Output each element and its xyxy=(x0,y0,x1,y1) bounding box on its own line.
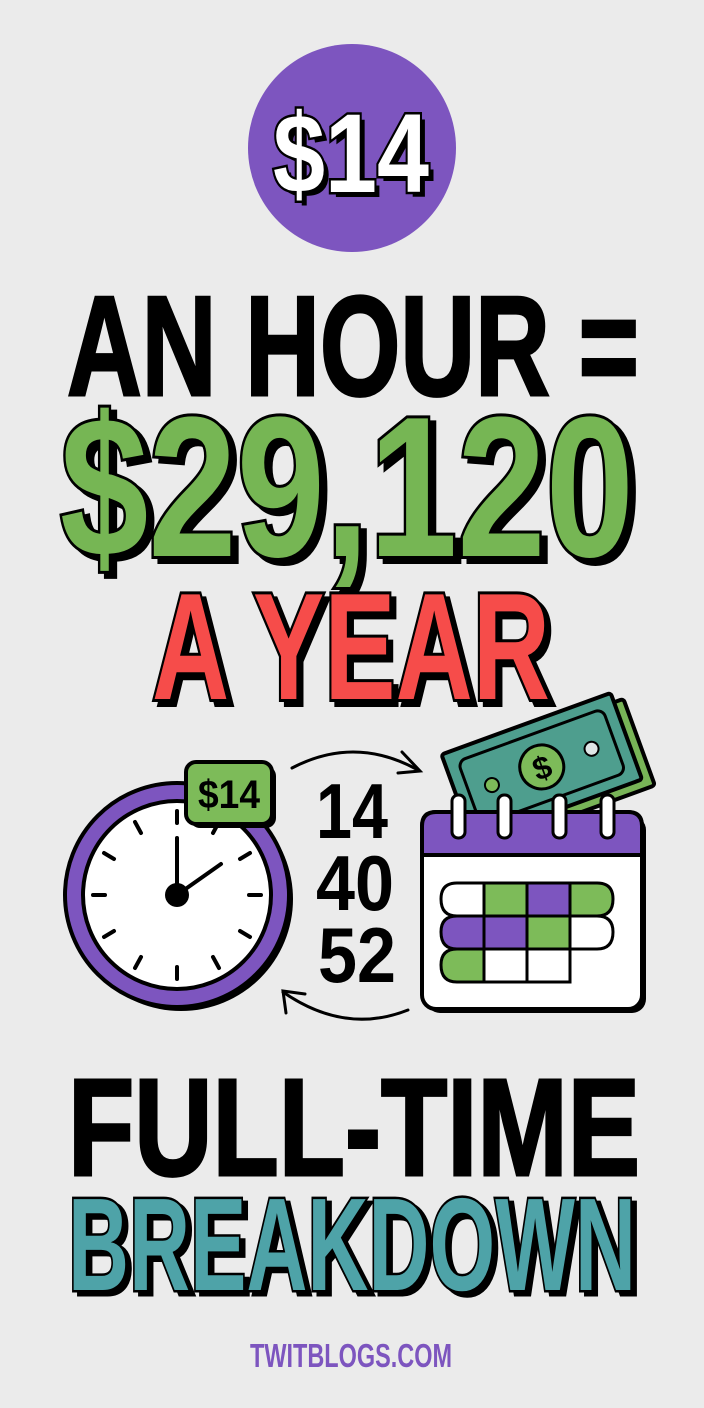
numbers: 14 40 52: 40 xyxy=(316,839,394,927)
label: $14 tag: $14 xyxy=(198,773,261,817)
calendar grid xyxy=(441,883,613,982)
badge: $14 circle: $14 xyxy=(273,91,429,216)
arrow: bottom curved xyxy=(283,991,408,1019)
badge: $14 circle xyxy=(248,44,456,252)
footer: TWITBLOGS.COM: TWITBLOGS.COM xyxy=(250,1337,452,1374)
icon: money bills xyxy=(441,689,655,850)
icon: calendar xyxy=(422,795,646,1013)
numbers: 14 40 52: 52 xyxy=(318,911,396,999)
badge: $14 circle: $14 xyxy=(278,96,434,221)
icon: clock xyxy=(65,762,293,1011)
icon: money bills: $ xyxy=(528,748,557,788)
heading: A YEAR: A YEAR xyxy=(152,562,550,732)
numbers: 14 40 52: 14 xyxy=(316,767,388,855)
arrow: top curved xyxy=(292,752,420,773)
label: $14 tag xyxy=(186,762,276,828)
numbers: 14 40 52 xyxy=(316,767,396,999)
